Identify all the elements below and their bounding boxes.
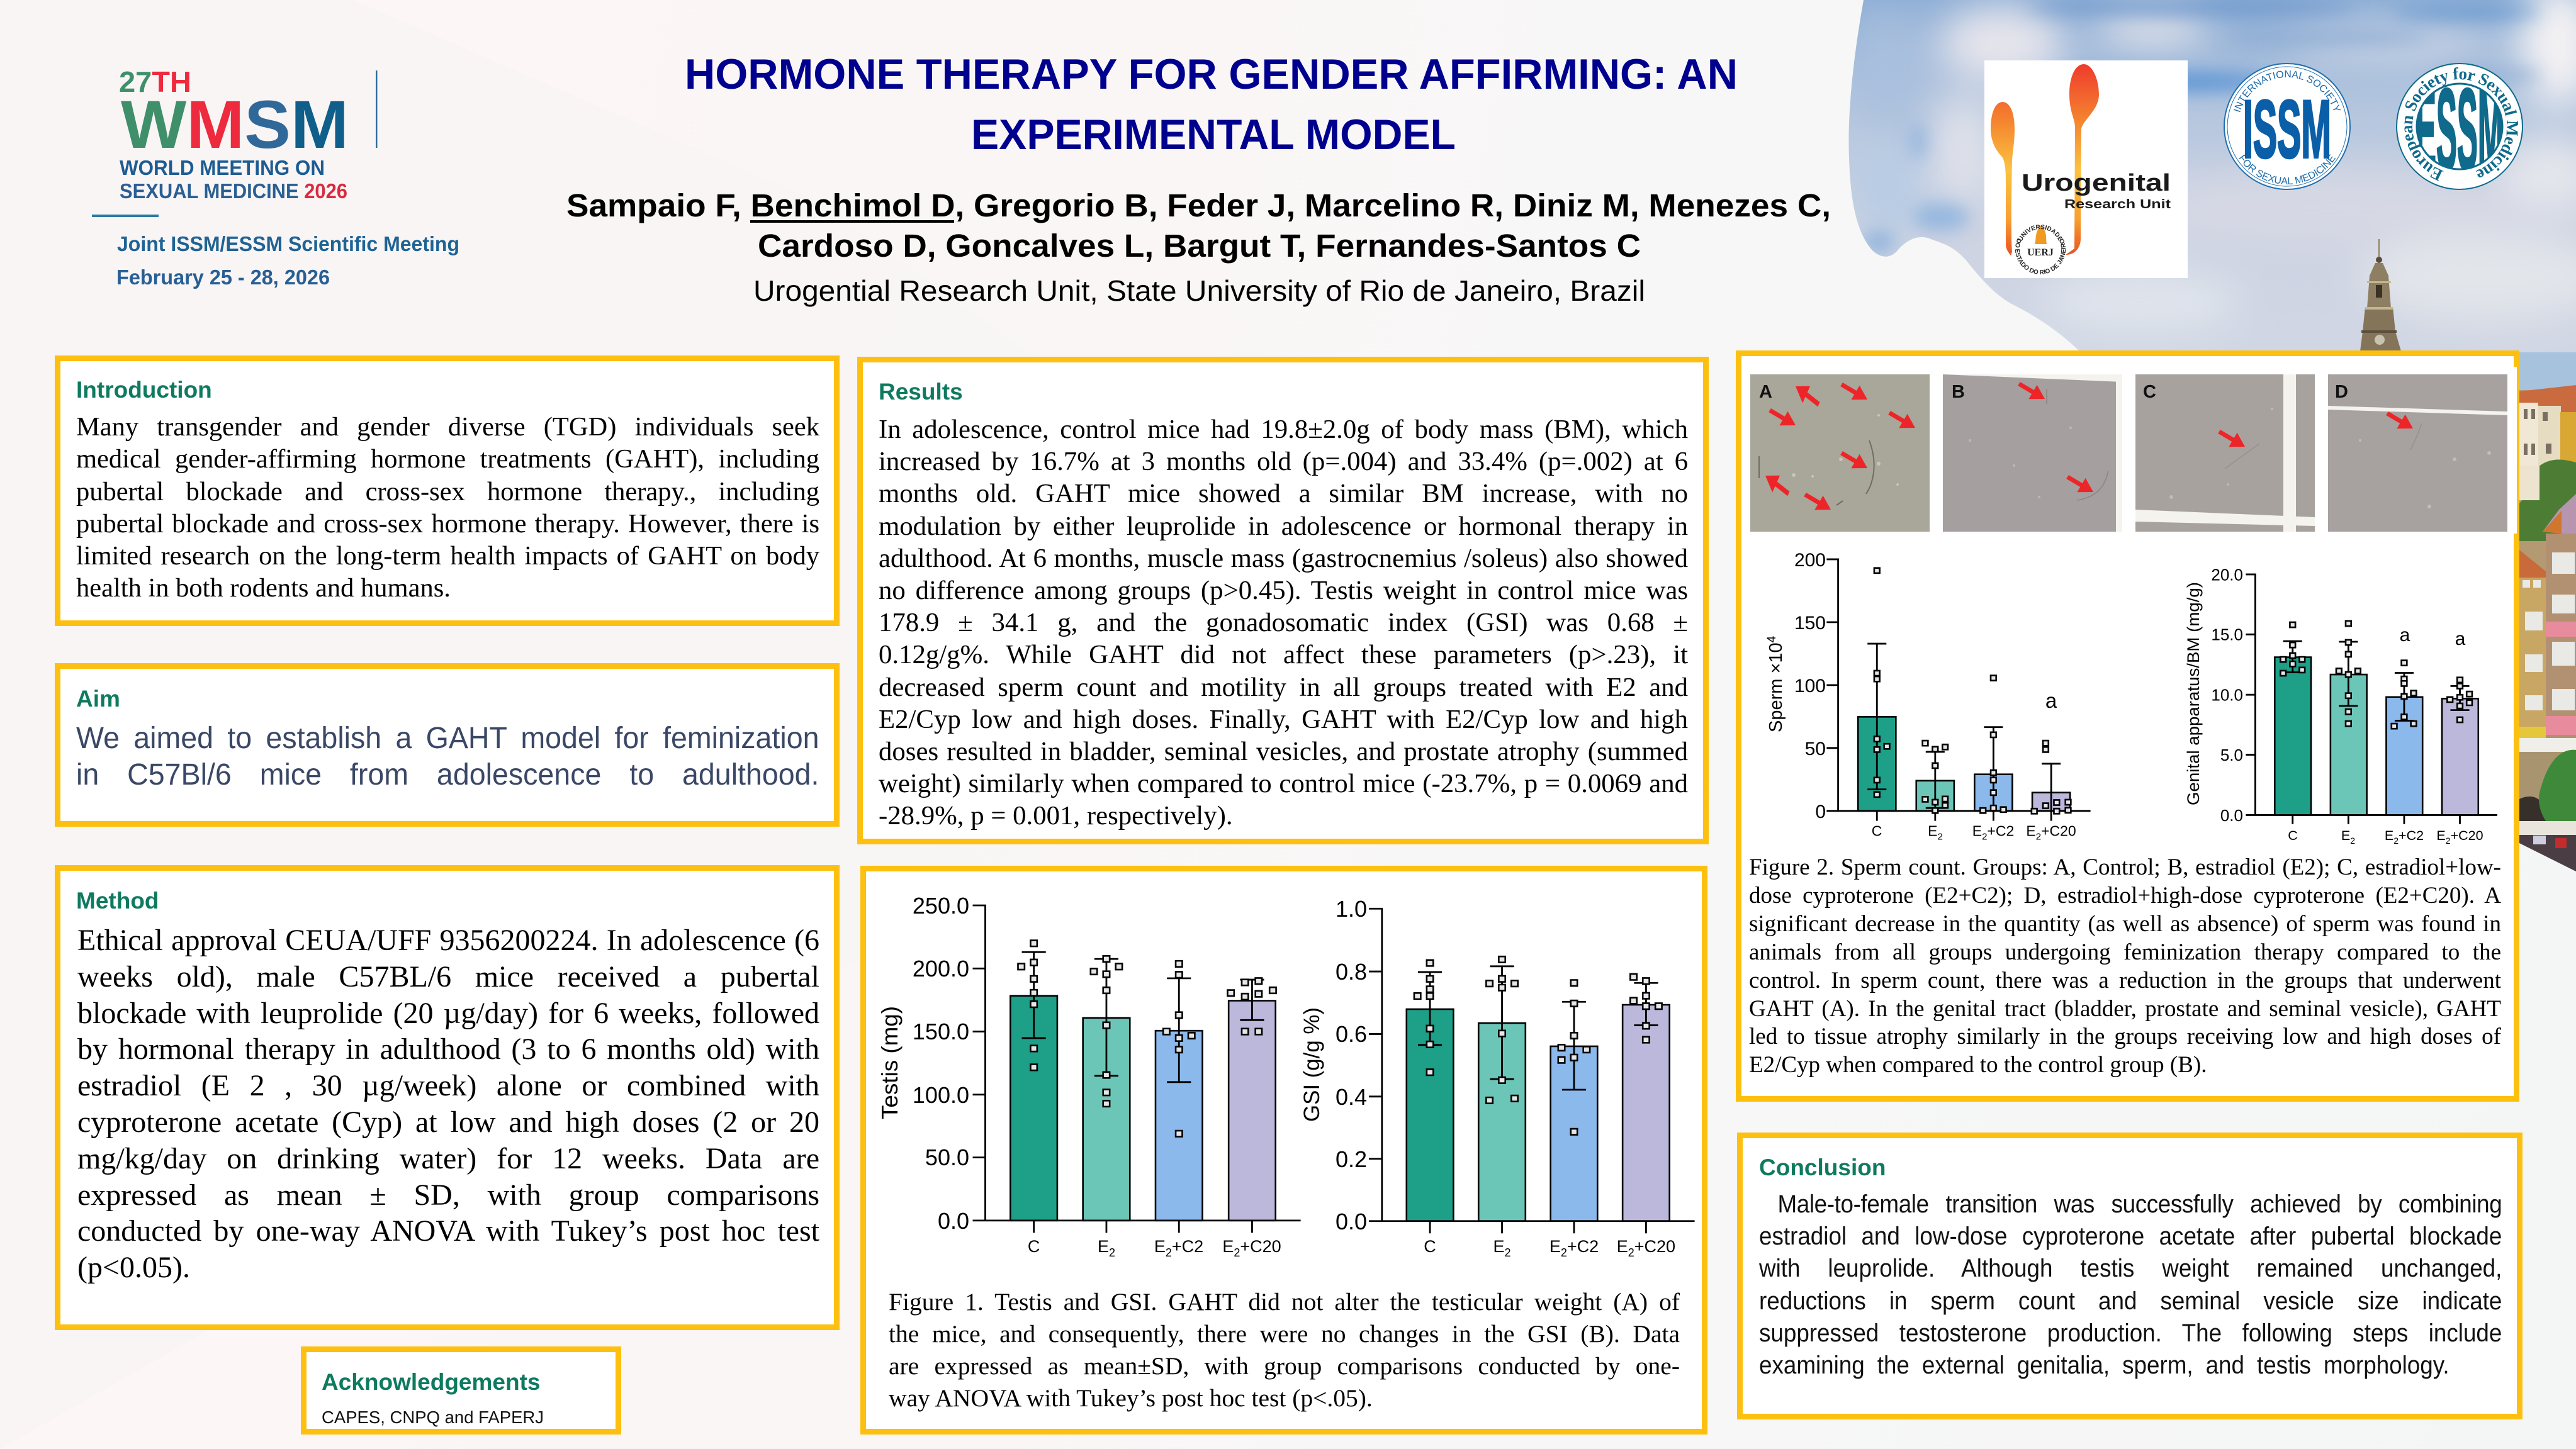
title and authors block xyxy=(0,0,1888,327)
logo: Urogenital Research Unit xyxy=(1984,60,2188,278)
caption: figure 1: way ANOVA with Tukey’s post hoc test (p<.05). xyxy=(889,1384,1373,1412)
text: aim: in C57Bl/6 mice from adolescence to adulthood. xyxy=(76,758,819,792)
bar chart: gonadosomatic index: GSI (g/g %) xyxy=(1300,1007,1324,1122)
meeting name: WORLD MEETING ON xyxy=(120,156,325,179)
text: introduction: pubertal blockade and cross-sex hormone therapy., including xyxy=(76,477,819,506)
heading: acknowledgements: Acknowledgements xyxy=(322,1369,540,1395)
caption: figure 1: the mice, and consequently, there were no changes in the GSI (B). Data xyxy=(889,1320,1680,1348)
bar chart: sperm count: Sperm ×10 xyxy=(1766,642,1786,732)
text: results: doses resulted in bladder, seminal vesicles, and prostate atrophy (summed xyxy=(879,737,1688,766)
text: results: increased by 16.7% at 3 months old (p=.004) and 33.4% (p=.002) at 6 xyxy=(879,447,1688,476)
27TH edition mark: 27TH xyxy=(119,65,191,98)
bar chart: gonadosomatic index: 2 xyxy=(1628,1246,1634,1259)
bar chart: testis weight: 2 xyxy=(1234,1246,1240,1259)
bar chart: testis weight: 150.0 xyxy=(913,1019,969,1044)
bar chart: testis weight: 200.0 xyxy=(913,956,969,982)
micrograph C xyxy=(2135,374,2315,532)
caption: figure 2 xyxy=(1749,854,2501,1080)
text: conclusion: reductions in sperm count and seminal vesicle size indicate xyxy=(1759,1287,2502,1315)
bar chart: sperm count: 200 xyxy=(1794,550,1826,571)
text: method: estradiol (E 2 , 30 µg/week) alone or combined with xyxy=(77,1069,819,1102)
text: results: In adolescence, control mice had 19.8±2.0g of body mass (BM), which xyxy=(879,415,1688,444)
text: results: 178.9 ± 34.1 g, and the gonadosomatic index (GSI) was 0.68 ± xyxy=(879,608,1688,637)
bar chart: genital apparatus: a xyxy=(2400,625,2410,646)
text: aim: We aimed to establish a GAHT model for feminization xyxy=(76,722,819,755)
panel: results xyxy=(857,357,1709,844)
text: conclusion: examining the external genitalia, sperm, and testis morphology. xyxy=(1759,1351,2449,1379)
micrograph A: A xyxy=(1759,382,1772,402)
caption: figure 1: Figure 1. Testis and GSI. GAHT did not alter the testicular weight (A) of xyxy=(889,1287,1680,1315)
logo: ISSM xyxy=(2224,64,2350,189)
bar chart: genital apparatus: a xyxy=(2455,629,2466,649)
panel: figure 1 xyxy=(860,866,1707,1435)
text: introduction: pubertal blockade and cross-sex hormone therapy. However, there is xyxy=(76,509,819,539)
heading: aim: Aim xyxy=(76,686,120,712)
text: method: mg/kg/day on drinking water) for 12 weeks. Data are xyxy=(77,1142,819,1175)
bar chart: genital apparatus: +C2 xyxy=(2399,828,2424,843)
bar chart: gonadosomatic index: 2 xyxy=(1561,1246,1567,1259)
caption: figure 1 xyxy=(889,1286,1680,1415)
affiliation: Urogential Research Unit, State University of Rio de Janeiro, Brazil xyxy=(753,274,1645,307)
bar chart: genital apparatus: 15.0 xyxy=(2211,625,2243,644)
charts: figure 1 testis and GSI xyxy=(0,0,1712,1284)
text: method: blockade with leuprolide (20 µg/day) for 6 weeks, followed xyxy=(77,997,819,1030)
panel: method xyxy=(55,865,840,1330)
text: results: months old. GAHT mice showed a similar BM increase, with no xyxy=(879,479,1688,508)
bar chart: testis weight xyxy=(877,893,1301,1259)
heading: results: Results xyxy=(879,379,963,405)
text: conclusion xyxy=(1759,1189,2502,1382)
micrograph B: B xyxy=(1952,382,1965,402)
text: results: modulation by either leuprolide in adolescence or hormonal therapy in xyxy=(879,512,1688,541)
bar chart: sperm count: +C20 xyxy=(2041,823,2076,839)
logo: Urogenital Research Unit: Urogenital xyxy=(2022,170,2171,196)
logo: ISSM: ISSM xyxy=(2243,83,2331,175)
bar chart: sperm count: E xyxy=(1972,823,1982,839)
authors: Cardoso D, Goncalves L, Bargut T, Fernandes-Santos C xyxy=(758,228,1641,264)
bar chart: testis weight: E xyxy=(1154,1237,1166,1256)
micrograph D: D xyxy=(2335,382,2348,402)
bar chart: genital apparatus: +C20 xyxy=(2451,828,2483,843)
text: method xyxy=(77,922,819,1286)
bar chart: gonadosomatic index: C xyxy=(1424,1237,1436,1256)
bar chart: genital apparatus xyxy=(2184,565,2497,846)
bar chart: gonadosomatic index: 0.8 xyxy=(1336,959,1367,985)
bar chart: genital apparatus: 2 xyxy=(2350,836,2355,846)
bar chart: testis weight: 2 xyxy=(1109,1246,1115,1259)
bar chart: sperm count: 100 xyxy=(1794,676,1826,697)
text: introduction: limited research on the long-term health impacts of GAHT on body xyxy=(76,541,819,571)
text: method: (p<0.05). xyxy=(77,1251,190,1284)
bar chart: testis weight: 0.0 xyxy=(938,1208,969,1234)
bar chart: sperm count: E xyxy=(2026,823,2036,839)
bar chart: testis weight: +C2 xyxy=(1172,1237,1203,1256)
caption: figure 2: E2/Cyp when compared to the control group (B). xyxy=(1749,1052,2207,1078)
text: conclusion: Male-to-female transition was successfully achieved by combining xyxy=(1777,1190,2502,1218)
bar chart: gonadosomatic index: 0.6 xyxy=(1336,1021,1367,1047)
text: funding agencies: CAPES, CNPQ and FAPERJ xyxy=(322,1407,544,1427)
text: results: weight) similarly when compared to control mice (-23.7%, p = 0.0069 and xyxy=(879,769,1688,798)
text: method: weeks old), male C57BL/6 mice received a pubertal xyxy=(77,960,819,993)
bar chart: gonadosomatic index: E xyxy=(1550,1237,1561,1256)
bar chart: testis weight: +C20 xyxy=(1240,1237,1281,1256)
bar chart: genital apparatus: C xyxy=(2288,828,2298,843)
text: results xyxy=(879,413,1688,832)
micrograph A xyxy=(1750,374,1930,532)
text: method: Ethical approval CEUA/UFF 9356200224. In adolescence (6 xyxy=(77,924,819,957)
bar chart: genital apparatus: 2 xyxy=(2393,836,2399,846)
bar chart: genital apparatus: E xyxy=(2385,828,2393,843)
panel: acknowledgements xyxy=(301,1346,621,1435)
title: HORMONE THERAPY FOR GENDER AFFIRMING: AN xyxy=(685,50,1738,98)
logo: ISSM and ESSM xyxy=(2224,63,2523,190)
text: introduction: health in both rodents and humans. xyxy=(76,573,451,603)
panel: aim xyxy=(55,663,840,827)
logo: ISSM: FOR SEXUAL MEDICINE xyxy=(2239,154,2336,185)
text: results: decreased sperm count and motility in all groups treated with E2 and xyxy=(879,673,1688,702)
authors xyxy=(566,187,1831,264)
bar chart: genital apparatus: E xyxy=(2436,828,2446,843)
heading: introduction: Introduction xyxy=(76,377,212,403)
bar chart: sperm count: +C2 xyxy=(1987,823,2014,839)
bar chart: genital apparatus: 0.0 xyxy=(2220,806,2243,825)
bar chart: testis weight: 250.0 xyxy=(913,893,969,919)
tower xyxy=(2360,239,2401,351)
authors: Sampaio F, Benchimol D, Gregorio B, Feder J, Marcelino R, Diniz M, Menezes C, xyxy=(566,187,1831,223)
panel: figure 2 xyxy=(1736,350,2519,1102)
bar chart: sperm count: 0 xyxy=(1815,802,1826,822)
text: method: expressed as mean ± SD, with group comparisons xyxy=(77,1178,819,1212)
bar chart: genital apparatus: 20.0 xyxy=(2211,565,2243,584)
bar chart: genital apparatus: Genital apparatus/BM (mg/g) xyxy=(2184,582,2203,805)
logo: Urogenital Research Unit: Research Unit xyxy=(2064,198,2171,211)
bar chart: gonadosomatic index: E xyxy=(1493,1237,1504,1256)
text: conclusion: with leuprolide. Although testis weight remained unchanged, xyxy=(1759,1255,2502,1282)
bar chart: gonadosomatic index xyxy=(1300,896,1695,1259)
bar chart: testis weight: 50.0 xyxy=(925,1144,969,1170)
bar chart: genital apparatus: E xyxy=(2341,828,2350,843)
text: results: adulthood. At 6 months, muscle mass (gastrocnemius /soleus) also showed xyxy=(879,544,1688,573)
dates: February 25 - 28, 2026 xyxy=(116,266,330,289)
bar chart: sperm count: 4 xyxy=(1765,635,1779,642)
bar chart: sperm count: 150 xyxy=(1794,613,1826,634)
bar chart: sperm count: 2 xyxy=(2036,832,2041,842)
joint meeting line: Joint ISSM/ESSM Scientific Meeting xyxy=(117,232,459,255)
bar chart: sperm count: 2 xyxy=(1937,832,1943,842)
text: introduction xyxy=(76,411,819,605)
bar chart: gonadosomatic index: 0.0 xyxy=(1336,1209,1367,1234)
bar chart: sperm count: E xyxy=(1928,823,1937,839)
text: conclusion: estradiol and low-dose cyproterone acetate after pubertal blockade xyxy=(1759,1222,2502,1250)
bar chart: genital apparatus: 5.0 xyxy=(2220,746,2243,764)
bar chart: testis weight: 2 xyxy=(1166,1246,1172,1259)
text: conclusion: suppressed testosterone production. The following steps include xyxy=(1759,1319,2502,1347)
micrograph C: C xyxy=(2143,382,2156,402)
bar chart: gonadosomatic index: 2 xyxy=(1504,1246,1511,1259)
text: results: no difference among groups (p>0.45). Testis weight in control mice was xyxy=(879,576,1688,605)
caption: figure 2: GAHT (A). In the genital tract (bladder, prostate and seminal vesicle), GAHT xyxy=(1749,996,2501,1022)
caption: figure 2: control. In sperm count, there was a reduction in the groups that underwent xyxy=(1749,968,2501,993)
panel: conclusion xyxy=(1737,1133,2523,1419)
bar chart: gonadosomatic index: +C20 xyxy=(1634,1237,1675,1256)
bar chart: genital apparatus: 2 xyxy=(2446,836,2451,846)
sexual medicine 2026: SEXUAL MEDICINE 2026 xyxy=(120,179,347,203)
text: introduction: Many transgender and gender diverse (TGD) individuals seek xyxy=(76,412,819,442)
caption: figure 2: dose cyproterone (E2+C2); D, estradiol+high-dose cyproterone (E2+C20). A xyxy=(1749,883,2501,909)
text: method: cyproterone acetate (Cyp) at low and high doses (2 or 20 xyxy=(77,1105,819,1139)
bar chart: sperm count: C xyxy=(1872,823,1882,839)
bar chart: sperm count: a xyxy=(2045,689,2057,712)
bar chart: testis weight: E xyxy=(1098,1237,1109,1256)
caption: figure 2: Figure 2. Sperm count. Groups: A, Control; B, estradiol (E2); C, estradiol+low- xyxy=(1749,854,2501,880)
heading: conclusion: Conclusion xyxy=(1759,1155,1886,1180)
text: method: by hormonal therapy in adulthood (3 to 6 months old) with xyxy=(77,1032,819,1066)
micrographs: sperm samples A to D xyxy=(0,0,2576,881)
title xyxy=(685,50,1738,159)
bar chart: gonadosomatic index: 0.4 xyxy=(1336,1084,1367,1110)
title: EXPERIMENTAL MODEL xyxy=(971,111,1456,159)
logo: Urogenital Research Unit: UERJ xyxy=(2027,247,2054,258)
logo: ISSM: INTERNATIONAL SOCIETY xyxy=(2234,70,2341,112)
logo: ESSM: European Society for Sexual Medicine xyxy=(2397,64,2522,185)
caption: figure 2: led to tissue atrophy similarly in the groups receiving low and high doses of xyxy=(1749,1024,2501,1049)
panel: introduction xyxy=(55,355,840,626)
text: aim xyxy=(76,720,819,793)
conference logo: 27th WMSM xyxy=(0,0,503,315)
text: results: E2/Cyp low and high doses. Finally, GAHT with E2/Cyp low and high xyxy=(879,705,1688,734)
WMSM wordmark: WMSM xyxy=(121,86,349,162)
logo: Urogenital Research Unit: DO ESTADO DO RIO DE JANEIRO xyxy=(2015,238,2066,274)
caption: figure 1: are expressed as mean±SD, with group comparisons conducted by one- xyxy=(889,1352,1680,1380)
text: results: -28.9%, p = 0.001, respectively). xyxy=(879,801,1233,831)
bar chart: sperm count: 2 xyxy=(1982,832,1987,842)
micrograph B xyxy=(1943,374,2122,532)
micrograph D xyxy=(2328,374,2507,532)
bar chart: genital apparatus: 10.0 xyxy=(2211,686,2243,705)
bar chart: testis weight: 100.0 xyxy=(913,1082,969,1108)
bar chart: sperm count xyxy=(1765,550,2091,842)
logo: Urogenital Research Unit: UNIVERSIDADE xyxy=(2018,225,2063,242)
bar chart: gonadosomatic index: 1.0 xyxy=(1336,896,1367,922)
caption: figure 2: animals from all groups undergoing feminization therapy compared to the xyxy=(1749,939,2501,965)
bar chart: testis weight: Testis (mg) xyxy=(877,1006,903,1119)
caption: figure 2: significant decrease in the quantity (as well as absence) of sperm was found in xyxy=(1749,911,2501,937)
bar chart: testis weight: C xyxy=(1028,1237,1040,1256)
bar chart: gonadosomatic index: +C2 xyxy=(1567,1237,1599,1256)
bar chart: gonadosomatic index: E xyxy=(1617,1237,1628,1256)
text: introduction: medical gender-affirming hormone treatments (GAHT), including xyxy=(76,444,819,474)
heading: method: Method xyxy=(76,888,159,914)
bar chart: testis weight: E xyxy=(1222,1237,1234,1256)
text: results: 0.12g/g%. While GAHT did not affect these parameters (p>.23), it xyxy=(879,640,1688,669)
bar chart: gonadosomatic index: 0.2 xyxy=(1336,1146,1367,1172)
background artwork: sky, tower and city xyxy=(1849,0,2576,871)
text: method: conducted by one-way ANOVA with Tukey’s post hoc test xyxy=(77,1214,819,1248)
bar chart: sperm count: 50 xyxy=(1805,739,1826,759)
